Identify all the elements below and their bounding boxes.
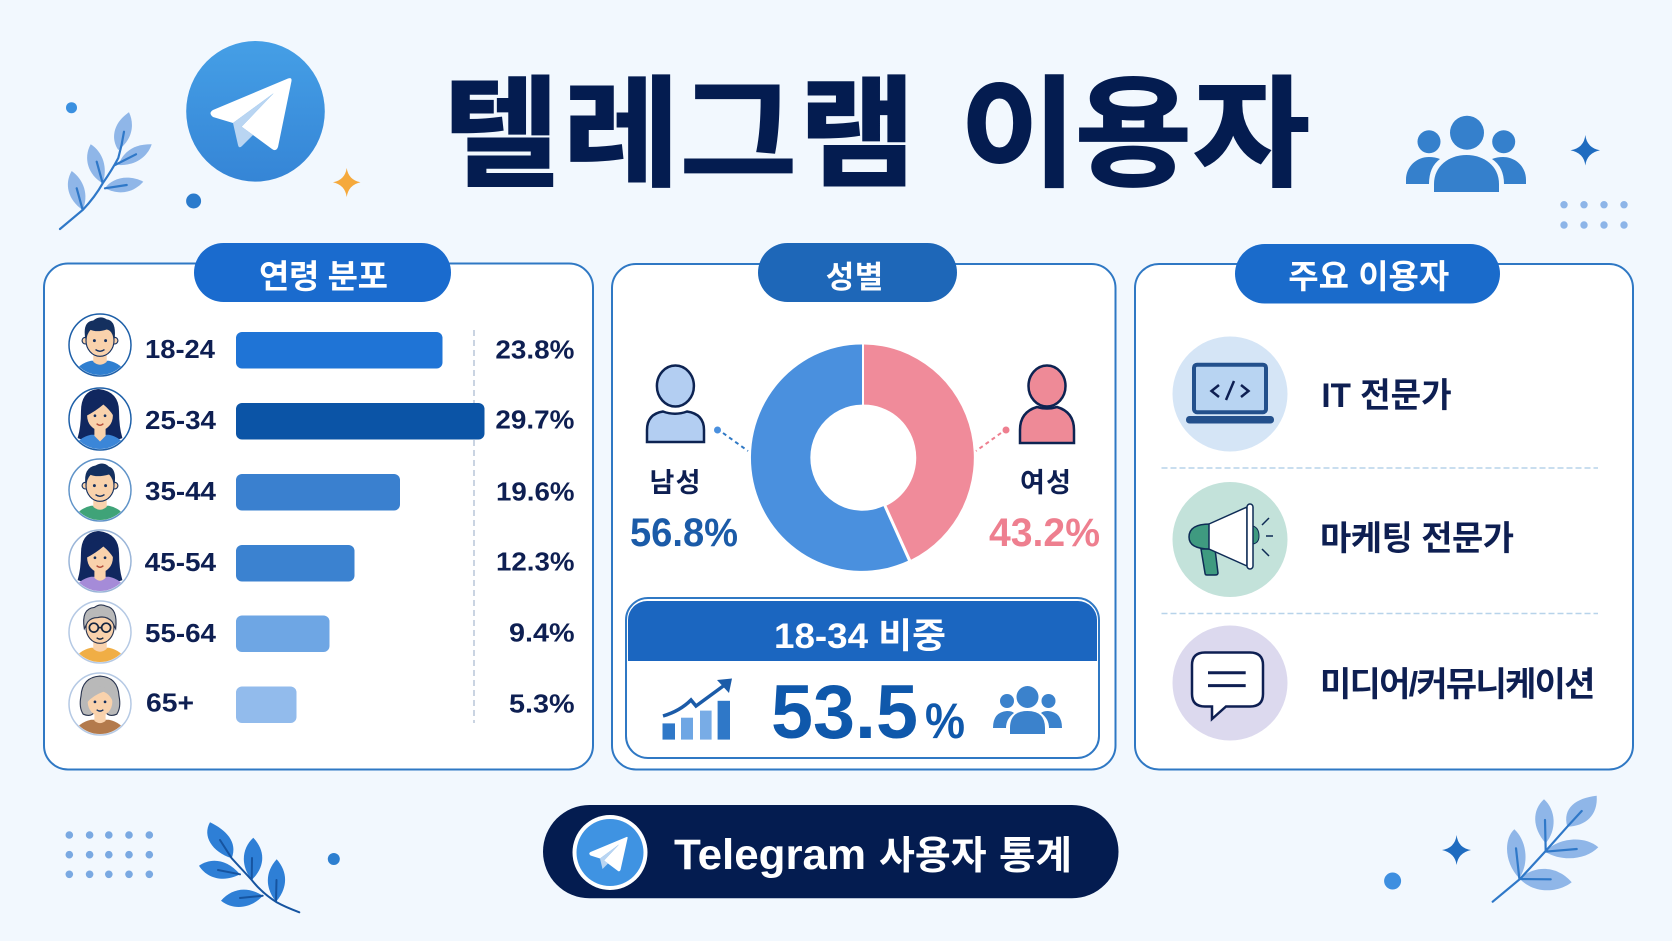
icon: laptop bbox=[1172, 336, 1288, 452]
bar: 55-64 bbox=[236, 616, 330, 652]
bar: 45-54 bbox=[236, 545, 354, 582]
heading pill: main users bbox=[1235, 244, 1500, 304]
percent sign: % bbox=[925, 693, 965, 749]
footer text: Telegram bbox=[674, 831, 866, 879]
avatar: 25-34 bbox=[69, 388, 131, 453]
label: 45-54: 45-54 bbox=[145, 547, 217, 577]
icon: female person bbox=[1020, 366, 1074, 443]
heading pill: age distribution: 연령 분포 bbox=[259, 258, 388, 295]
panel: age distribution bbox=[44, 243, 593, 770]
callout heading: 18-34 비중 bbox=[774, 617, 946, 656]
decoration: top-left branch and dots bbox=[60, 102, 201, 229]
heading pill: main users: 주요 이용자 bbox=[1288, 258, 1449, 295]
connector: male bbox=[714, 426, 748, 451]
icon: chat bubble bbox=[1172, 626, 1288, 740]
avatar: 35-44 bbox=[69, 459, 131, 524]
callout: 18-34 share bbox=[626, 598, 1099, 758]
avatar: 55-64 bbox=[69, 601, 131, 666]
bar: 35-44 bbox=[236, 474, 400, 510]
value: 23.8%: 23.8% bbox=[495, 334, 574, 364]
value: male: 56.8% bbox=[630, 511, 738, 555]
label: marketing professionals: 마케팅 전문가 bbox=[1320, 520, 1514, 558]
label: male: 남성 bbox=[650, 468, 700, 498]
donut chart bbox=[751, 344, 974, 571]
connector: female bbox=[976, 426, 1010, 451]
icon: orange sparkle bbox=[333, 168, 360, 197]
bar: 65+ bbox=[236, 686, 296, 723]
value: 19.6%: 19.6% bbox=[496, 476, 574, 506]
decoration: bottom-right branch bbox=[1493, 796, 1598, 902]
avatar: 18-24 bbox=[69, 314, 131, 379]
label: 35-44: 35-44 bbox=[145, 476, 217, 506]
icon: telegram logo bbox=[186, 41, 325, 182]
dashed reference line bbox=[473, 330, 475, 723]
value: 5.3%: 5.3% bbox=[509, 688, 575, 718]
callout header bbox=[628, 601, 1097, 661]
value: female: 43.2% bbox=[989, 511, 1100, 555]
value: 29.7%: 29.7% bbox=[495, 405, 574, 435]
label: 55-64: 55-64 bbox=[145, 618, 217, 648]
big number: 53.5 bbox=[771, 670, 918, 755]
heading pill: gender bbox=[758, 243, 957, 302]
icon: growth chart bbox=[662, 678, 732, 740]
value: 9.4%: 9.4% bbox=[509, 618, 575, 648]
footer badge bbox=[543, 805, 1118, 898]
heading pill: age distribution bbox=[194, 243, 451, 302]
bar: 25-34 bbox=[236, 403, 484, 440]
decoration: top-right sparkle and dots bbox=[1560, 135, 1628, 229]
avatar: 65+ bbox=[69, 673, 131, 738]
decoration: bottom-right sparkle and dot bbox=[1384, 835, 1471, 890]
icon: people top right bbox=[1406, 116, 1526, 192]
icon: footer telegram logo bbox=[572, 815, 648, 890]
value: 12.3%: 12.3% bbox=[496, 547, 574, 577]
footer text: 사용자 bbox=[879, 835, 987, 878]
icon: people bbox=[993, 686, 1062, 734]
label: 65+: 65+ bbox=[146, 688, 194, 718]
label: IT professionals: IT 전문가 bbox=[1321, 377, 1452, 415]
label: media and communications: 미디어/커뮤니케이션 bbox=[1320, 666, 1595, 704]
panel: main users bbox=[1135, 244, 1633, 770]
label: female: 여성 bbox=[1020, 468, 1071, 498]
heading pill: gender: 성별 bbox=[826, 260, 883, 295]
label: 18-24: 18-24 bbox=[145, 334, 216, 364]
icon: male person bbox=[647, 366, 704, 442]
avatar: 45-54 bbox=[69, 530, 131, 595]
bar: 18-24 bbox=[236, 332, 442, 368]
icon: megaphone bbox=[1172, 482, 1288, 597]
panel: gender bbox=[612, 243, 1116, 770]
decoration: bottom-left branch bbox=[199, 822, 340, 912]
footer text: 통계 bbox=[999, 835, 1072, 878]
decoration: bottom-left dots bbox=[66, 831, 153, 878]
title: 텔레그램 이용자 bbox=[443, 68, 1310, 202]
label: 25-34: 25-34 bbox=[145, 405, 217, 435]
